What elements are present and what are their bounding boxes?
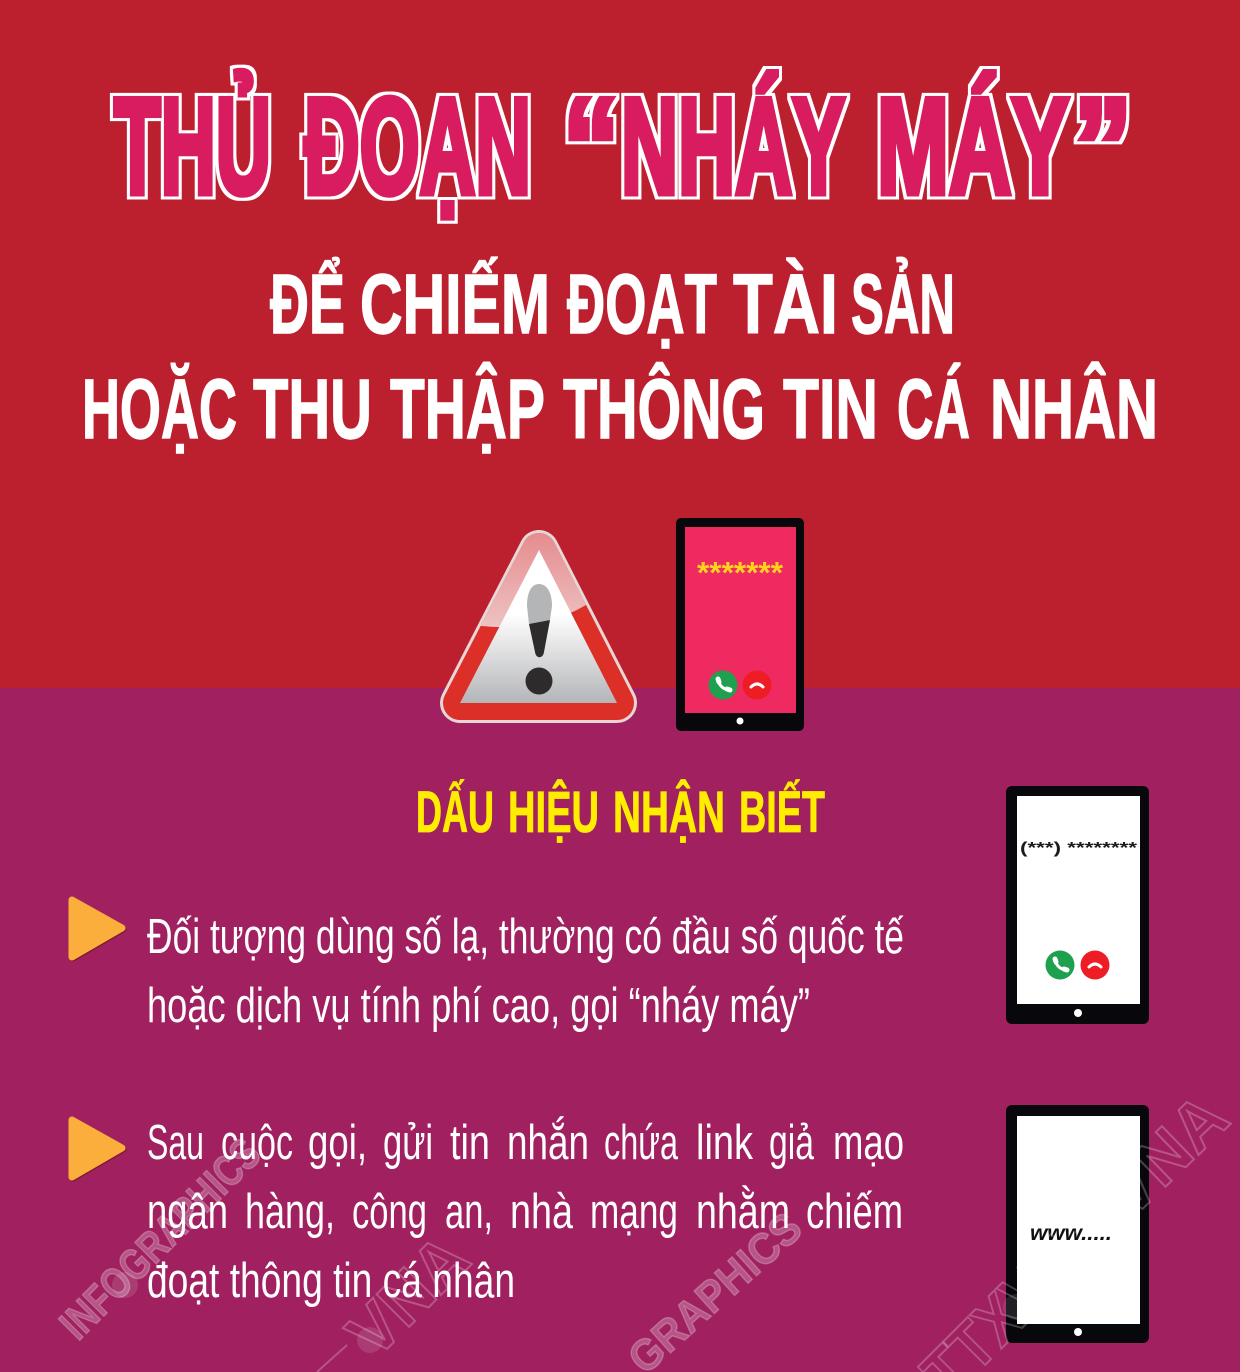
icon: pink phone with hidden number bbox=[676, 518, 804, 731]
icon: phone with fake link bbox=[1006, 1105, 1149, 1343]
heading: dấu hiệu nhận biết: NHẬN bbox=[613, 780, 725, 845]
subtitle: TÀI bbox=[733, 257, 838, 351]
text block: sign 2: link bbox=[696, 1116, 753, 1170]
text block: sign 2: mạo bbox=[833, 1116, 904, 1170]
subtitle: THU bbox=[253, 362, 372, 456]
heading: dấu hiệu nhận biết: DẤU bbox=[416, 780, 494, 845]
subtitle: CHIẾM bbox=[360, 257, 550, 351]
subtitle: ĐOẠT bbox=[567, 257, 717, 351]
icon: phone with unknown number: (***) ******** bbox=[1020, 840, 1138, 857]
text block: sign 2: công bbox=[352, 1185, 427, 1239]
icon: arrow bullet 2 bbox=[72, 1120, 122, 1177]
text block: sign 2: gọi, bbox=[308, 1116, 367, 1170]
watermark: infographics: INFOGRAPHICS bbox=[50, 1129, 270, 1349]
subtitle: THẬP bbox=[390, 362, 545, 456]
icon: warning triangle bbox=[460, 550, 617, 703]
text block: sign 2: chứa bbox=[604, 1116, 678, 1170]
text block: sign 2: gửi bbox=[383, 1116, 433, 1170]
watermark: outlined agency marks: VNA bbox=[1088, 1079, 1240, 1232]
heading: dấu hiệu nhận biết: HIỆU bbox=[508, 780, 599, 845]
subtitle: TIN bbox=[783, 362, 878, 456]
text block: sign 2: mạng bbox=[590, 1185, 678, 1239]
text block: sign 2: giả bbox=[769, 1116, 815, 1170]
icon: phone with unknown number bbox=[1006, 786, 1149, 1024]
watermark: infographics bbox=[50, 1129, 811, 1372]
subtitle: HOẶC bbox=[82, 362, 237, 456]
panel: red header background bbox=[0, 0, 1240, 688]
subtitle bbox=[82, 257, 1158, 456]
title: thủ đoạn nháy máy: MÁY bbox=[877, 70, 1069, 222]
text block: sign 2: chiếm bbox=[806, 1185, 903, 1239]
title: thủ đoạn nháy máy: “ bbox=[563, 70, 619, 222]
heading: dấu hiệu nhận biết bbox=[416, 780, 825, 845]
heading: dấu hiệu nhận biết: BIẾT bbox=[739, 780, 825, 845]
text block: sign 1: hoặc dịch vụ tính phí cao, gọi “nháy máy” bbox=[147, 979, 810, 1033]
text block: sign 1: Đối tượng dùng số lạ, thường có đầu số quốc tế bbox=[147, 910, 904, 964]
panel: purple content background bbox=[0, 688, 1240, 1372]
text block: sign 2: ngân bbox=[147, 1185, 228, 1239]
icon: pink phone with hidden number: ******* bbox=[697, 555, 784, 590]
icon: phone with fake link: www..... bbox=[1030, 1222, 1112, 1245]
text block: sign 2 bbox=[147, 1116, 904, 1308]
subtitle: NHÂN bbox=[990, 362, 1158, 456]
watermark: outlined agency marks bbox=[112, 1079, 1240, 1372]
watermark: outlined agency marks: VNA bbox=[333, 1220, 484, 1372]
text block: sign 2: nhắn bbox=[507, 1116, 589, 1170]
text block: sign 2: hàng, bbox=[245, 1185, 335, 1239]
subtitle: SẢN bbox=[851, 257, 955, 351]
text block: sign 2: nhà bbox=[510, 1185, 574, 1239]
subtitle: THÔNG bbox=[563, 362, 765, 456]
text block: sign 2: đoạt thông tin cá nhân bbox=[147, 1254, 515, 1308]
icon: arrow bullet 1 bbox=[72, 900, 122, 957]
title: thủ đoạn nháy máy: ĐOẠN bbox=[304, 70, 531, 222]
title: thủ đoạn nháy máy: NHÁY bbox=[621, 70, 845, 222]
title: thủ đoạn nháy máy bbox=[114, 70, 1132, 222]
subtitle: CÁ bbox=[897, 362, 970, 456]
title: thủ đoạn nháy máy: THỦ bbox=[114, 70, 271, 222]
text block: sign 2: Sau bbox=[147, 1116, 204, 1170]
subtitle: ĐỂ bbox=[270, 257, 345, 351]
text block: sign 2: cuộc bbox=[221, 1116, 293, 1170]
text block: sign 2: nhằm bbox=[696, 1185, 790, 1239]
text block: sign 1 bbox=[147, 910, 904, 1033]
title: thủ đoạn nháy máy: ” bbox=[1074, 70, 1132, 222]
text block: sign 2: an, bbox=[445, 1185, 493, 1239]
text block: sign 2: tin bbox=[450, 1116, 490, 1170]
